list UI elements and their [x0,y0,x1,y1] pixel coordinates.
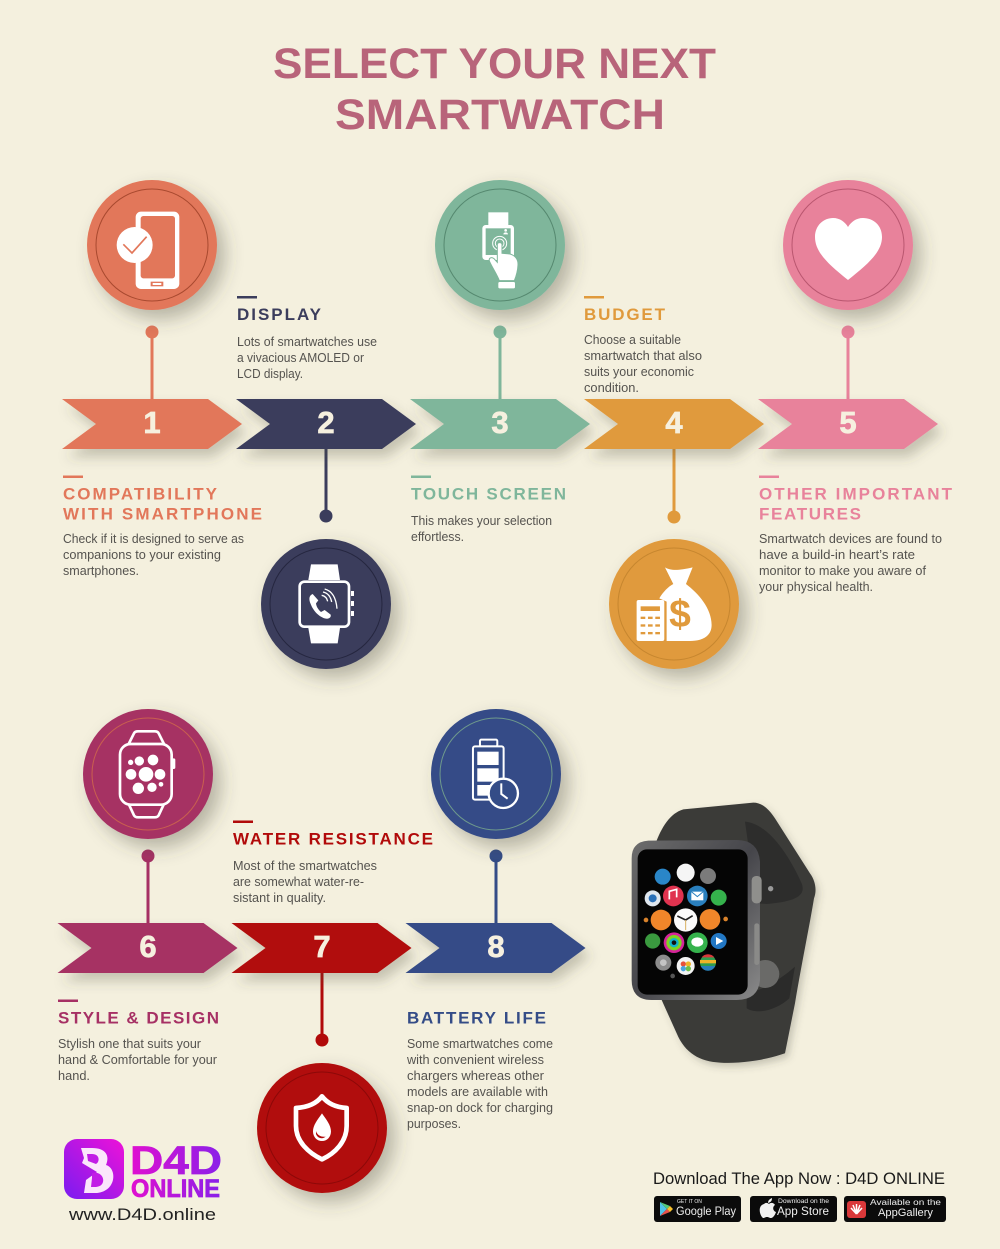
badge: google play: Google Play [676,1204,736,1218]
number 3: 3 [491,405,509,440]
circle icon: watch with call [261,539,391,669]
download section [653,1170,946,1222]
text: water resistance: WATER RESISTANCE [233,830,433,848]
text: battery life: purposes. [407,1116,461,1131]
text: water resistance: are somewhat water-re- [233,874,364,889]
number 7: 7 [313,929,331,964]
connector 6 [142,850,154,924]
logo wordmark: D4D [130,1139,222,1183]
text: battery life: BATTERY LIFE [407,1008,546,1028]
text: touch screen: effortless. [411,529,464,544]
circle icon: heart [783,180,913,310]
text: compatibility [63,476,262,578]
text: battery life: chargers whereas other [407,1068,545,1083]
circle icon: water shield [257,1063,387,1193]
logo wordmark: ONLINE [131,1175,220,1203]
text: other features: have a build-in heart’s rate [759,547,915,562]
text: display: DISPLAY [237,305,322,324]
text: compatibility: COMPATIBILITY [63,484,218,504]
title [273,40,716,139]
number 6: 6 [139,929,157,964]
connector 3 [494,326,506,400]
circle icon: touch watch [435,180,565,310]
number 2: 2 [317,405,335,440]
text: other features: Smartwatch devices are found to [759,531,942,546]
text: other features: monitor to make you aware of [759,563,926,578]
text: budget: Choose a suitable [584,332,681,347]
circle icon: money bag and calculator: $ [669,593,691,636]
circle icon: money bag and calculator [609,539,739,669]
connector 8 [490,850,502,924]
connector 7 [316,973,328,1046]
circle icon: battery and clock [431,709,561,839]
arrow 5 [758,399,938,449]
arrow 7 [232,923,412,973]
badge: app gallery: Available on the [870,1198,942,1207]
step 1: compatibility [62,180,262,578]
circle icon: app watch [83,709,213,839]
arrow 4 [584,399,764,449]
text: other features: your physical health. [759,579,873,594]
step 2: display [236,296,416,669]
connector 5 [842,326,854,400]
text: water resistance: sistant in quality. [233,890,326,905]
badge: app store: App Store [777,1204,829,1218]
number 8: 8 [487,929,505,964]
text: compatibility: companions to your existing [63,547,221,562]
text: display: Lots of smartwatches use [237,334,377,349]
text: display: a vivacious AMOLED or [237,350,365,365]
step 3: touch screen [410,180,590,544]
step 4: budget [584,296,764,669]
text: touch screen [411,476,566,544]
text: compatibility: Check if it is designed to serve as [63,531,244,546]
number 4: 4 [665,405,683,440]
step 8: battery life [406,709,586,1131]
badge: google play: GET IT ON [677,1199,702,1205]
text: display [237,296,377,381]
logo: D4D Online [64,1139,222,1224]
text: other features: OTHER IMPORTANT [759,484,953,504]
connector 4 [668,449,680,524]
title: SMARTWATCH [335,91,665,139]
text: touch screen: This makes your selection [411,513,552,528]
text: style and design: STYLE & DESIGN [58,1008,219,1028]
arrow 1 [62,399,242,449]
text: water resistance: Most of the smartwatches [233,858,377,873]
badge: app gallery: AppGallery [878,1207,933,1219]
text: water resistance [233,820,433,905]
circle icon: phone with check [87,180,217,310]
text: battery life: with convenient wireless [406,1052,544,1067]
text: budget: condition. [584,380,639,395]
text: budget: BUDGET [584,305,666,324]
logo wordmark [130,1139,222,1203]
download heading: Download The App Now : D4D ONLINE [653,1170,945,1188]
text: compatibility: smartphones. [63,563,139,578]
text: battery life: models are available with [407,1084,548,1099]
arrow 6 [58,923,238,973]
logo mark [64,1139,124,1199]
text: budget: suits your economic [584,364,694,379]
connector 2 [320,449,332,522]
badge: app store [750,1196,837,1222]
arrow 2 [236,399,416,449]
badge: app store: Download on the [778,1199,830,1205]
text: display: LCD display. [237,366,303,381]
text: style and design [58,1000,219,1083]
step 7: water resistance [232,820,433,1193]
text: other features [759,476,953,594]
text: style and design: hand. [58,1068,90,1083]
text: compatibility: WITH SMARTPHONE [63,504,262,524]
text: style and design: hand & Comfortable for your [58,1052,218,1067]
title: SELECT YOUR NEXT [273,40,716,88]
website url: www.D4D.online [68,1205,216,1224]
text: style and design: Stylish one that suits your [58,1036,202,1051]
text: touch screen: TOUCH SCREEN [411,484,566,504]
arrow 3 [410,399,590,449]
connector 1 [146,326,158,400]
text: battery life: snap-on dock for charging [407,1100,553,1115]
number 1: 1 [143,405,161,440]
text: budget: smartwatch that also [584,348,702,363]
text: battery life: Some smartwatches come [407,1036,553,1051]
badge: google play [654,1196,741,1222]
text: other features: FEATURES [759,504,861,524]
text: battery life [406,1008,553,1131]
number 5: 5 [839,405,857,440]
smartwatch illustration [632,803,816,1063]
arrow 8 [406,923,586,973]
step 5: other features [758,180,953,594]
step 6: style and design [58,709,238,1083]
text: budget [584,296,702,395]
badge: app gallery [844,1196,946,1222]
